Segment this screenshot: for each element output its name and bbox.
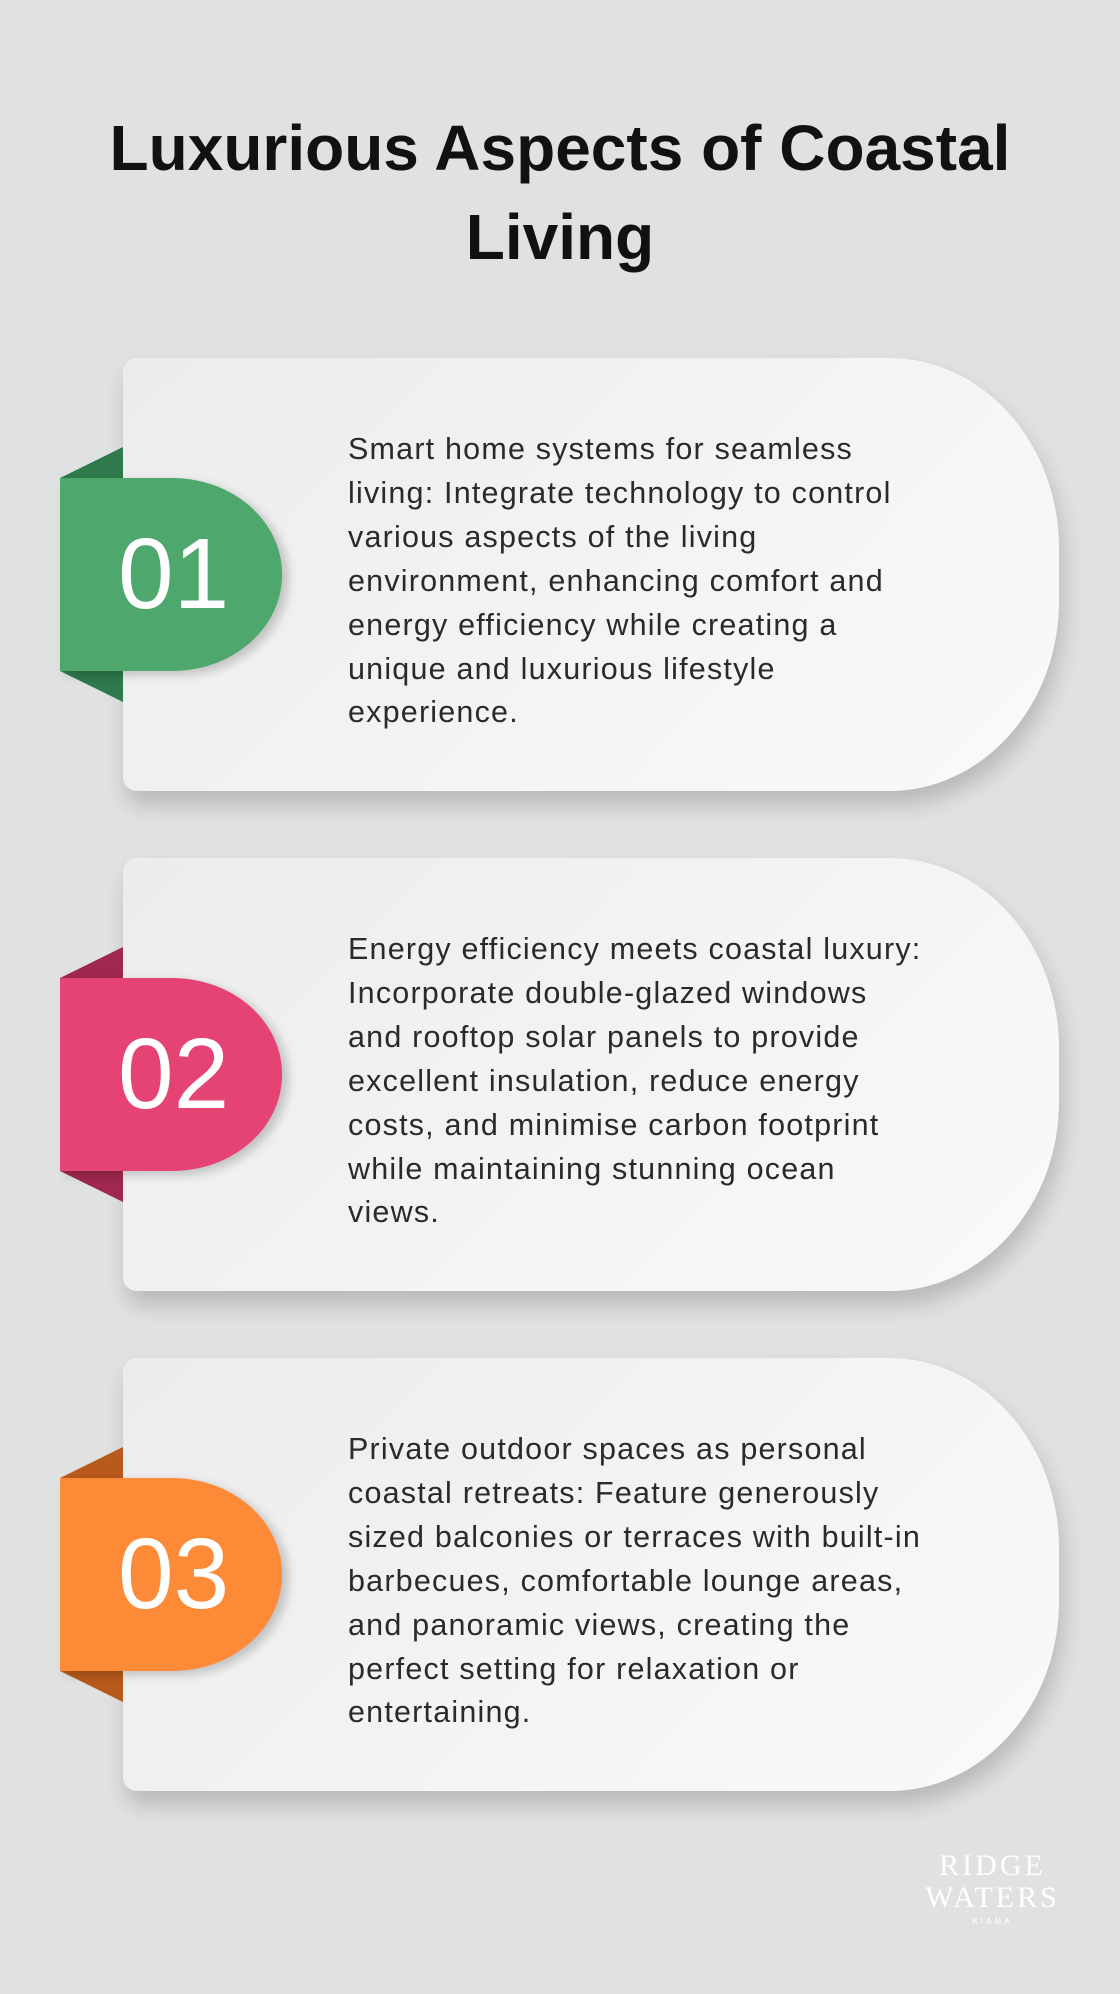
panel: card 3 — [123, 1358, 1059, 1791]
text block 1 — [348, 432, 892, 729]
logo: KIAMA — [973, 1917, 1012, 1926]
text block 1: environment, enhancing comfort and — [348, 564, 884, 598]
text block 3: and panoramic views, creating the — [348, 1608, 850, 1642]
text block 3 — [348, 1432, 921, 1729]
number tab 03 — [60, 1478, 282, 1671]
fold top 1 — [60, 447, 123, 478]
fold top 2 — [60, 947, 123, 978]
fold bottom 1 — [60, 671, 123, 702]
fold bottom 2 — [60, 1171, 123, 1202]
text block 2: excellent insulation, reduce energy — [348, 1064, 860, 1098]
title: Luxurious Aspects of Coastal — [110, 112, 1010, 184]
text block 3: barbecues, comfortable lounge areas, — [348, 1564, 903, 1598]
text block 1: various aspects of the living — [348, 520, 757, 554]
text block 3: coastal retreats: Feature generously — [348, 1476, 879, 1510]
number tab 01 — [60, 478, 282, 671]
title: Living — [466, 201, 654, 273]
text block 2: Incorporate double-glazed windows — [348, 976, 867, 1010]
text block 2: and rooftop solar panels to provide — [348, 1020, 860, 1054]
number tab 02 — [60, 978, 282, 1171]
text block 3: Private outdoor spaces as personal — [348, 1432, 867, 1466]
text block 1: living: Integrate technology to control — [348, 476, 892, 510]
text block 2: Energy efficiency meets coastal luxury: — [348, 932, 921, 966]
text block 2 — [348, 932, 921, 1229]
text block 3: sized balconies or terraces with built-in — [348, 1520, 921, 1554]
text block 2: views. — [348, 1195, 440, 1229]
text block 2: costs, and minimise carbon footprint — [348, 1108, 879, 1142]
text block 1: experience. — [348, 695, 519, 729]
fold bottom 3 — [60, 1671, 123, 1702]
logo — [925, 1849, 1060, 1926]
text block 1: Smart home systems for seamless — [348, 432, 853, 466]
title — [110, 112, 1010, 273]
text block 1: energy efficiency while creating a — [348, 608, 838, 642]
text block 3: entertaining. — [348, 1695, 531, 1729]
text block 2: while maintaining stunning ocean — [348, 1152, 836, 1186]
number tab 02: 02 — [118, 1018, 229, 1130]
text block 3: perfect setting for relaxation or — [348, 1652, 800, 1686]
panel: card 2 — [123, 858, 1059, 1291]
panel: card 1 — [123, 358, 1059, 791]
number tab 01: 01 — [118, 518, 229, 630]
text block 1: unique and luxurious lifestyle — [348, 652, 776, 686]
number tab 03: 03 — [118, 1518, 229, 1630]
logo: WATERS — [925, 1881, 1060, 1914]
fold top 3 — [60, 1447, 123, 1478]
logo: RIDGE — [939, 1849, 1046, 1882]
